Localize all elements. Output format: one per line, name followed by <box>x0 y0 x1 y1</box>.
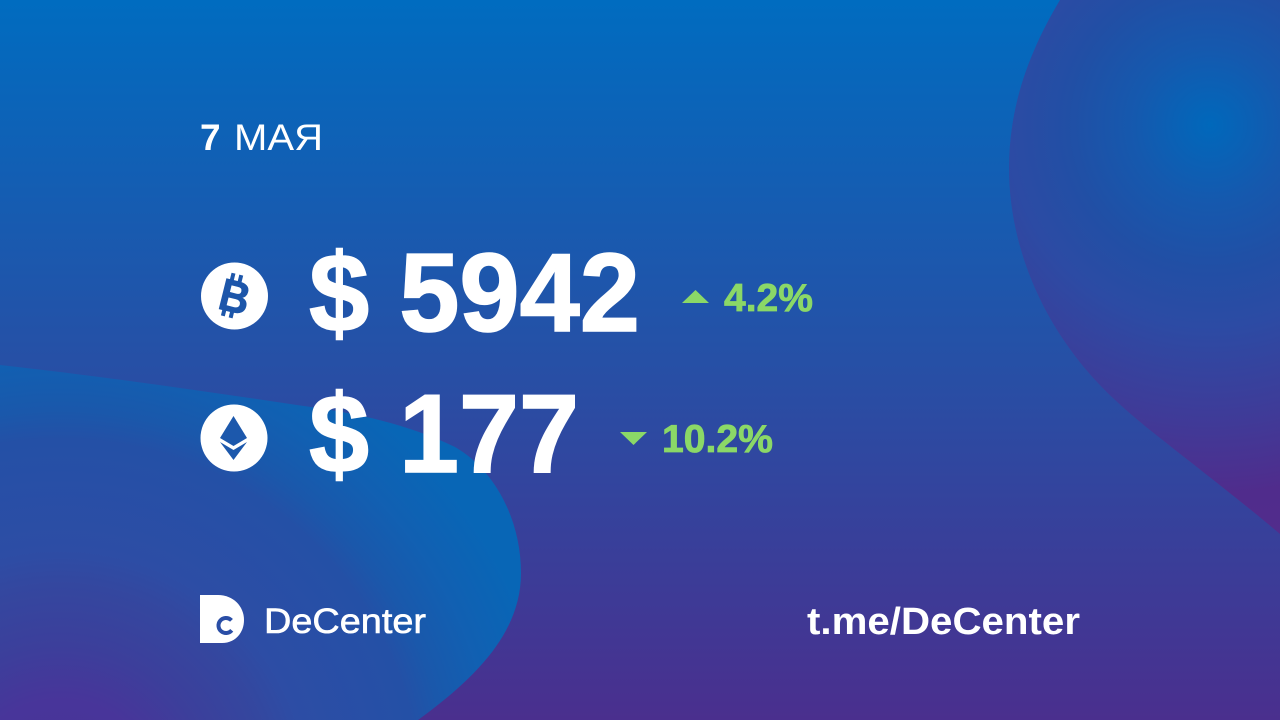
link: t.me/DeCenter <box>807 601 1080 643</box>
date heading <box>200 117 323 158</box>
bitcoin row <box>201 231 813 355</box>
icon: ethereum <box>200 404 268 472</box>
ethereum row <box>200 372 773 496</box>
ethereum price: $ 177 <box>309 372 579 496</box>
decorative blob: bottom left <box>0 365 521 720</box>
logo: DeCenter <box>200 595 426 643</box>
wordmark: DeCenter <box>264 602 426 641</box>
icon: bitcoin: B <box>214 268 256 325</box>
ethereum change: 10.2% <box>662 418 773 461</box>
date heading: 7 <box>200 117 221 158</box>
bitcoin change: 4.2% <box>724 277 813 320</box>
icon: up arrow <box>682 290 709 303</box>
bitcoin price: $ 5942 <box>309 231 640 355</box>
date heading: МАЯ <box>234 117 323 158</box>
icon: DeCenter mark <box>200 595 244 643</box>
icon: down arrow <box>620 432 647 445</box>
decorative blob: top right <box>1009 0 1280 534</box>
icon: bitcoin <box>201 262 268 330</box>
